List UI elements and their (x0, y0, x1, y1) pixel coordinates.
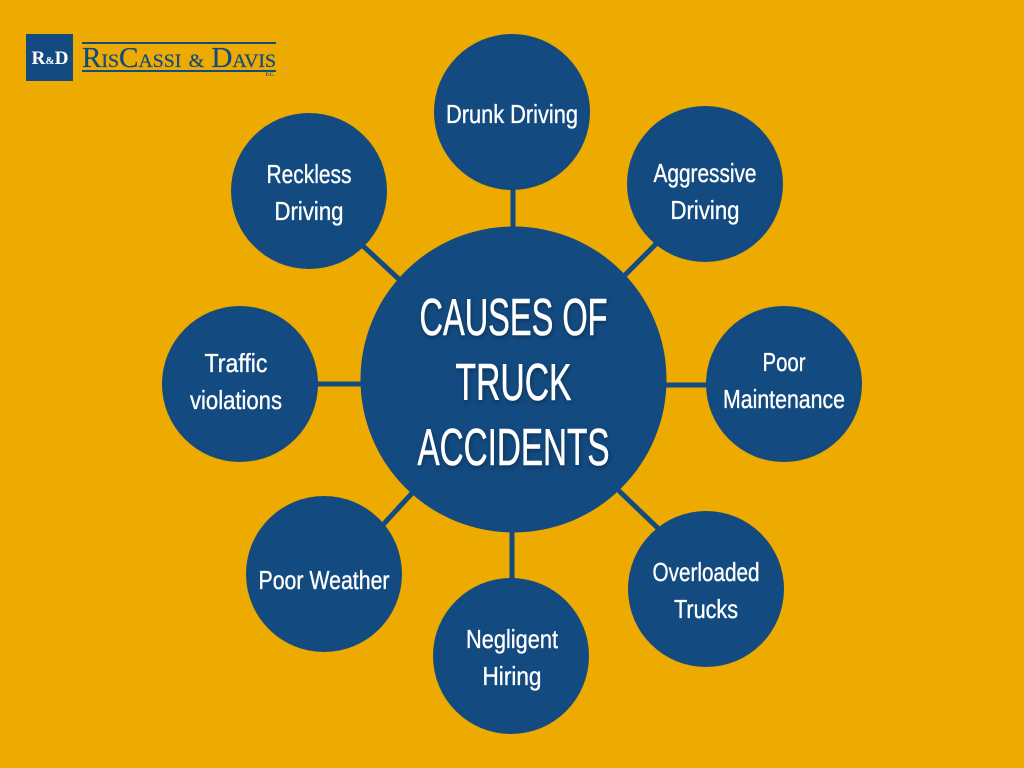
logo wordmark: RISCASSI & DAVIS (82, 43, 276, 74)
node: Drunk Driving (434, 34, 590, 190)
node: Reckless Driving: Driving (274, 196, 344, 226)
central title: CAUSES OF (420, 289, 608, 347)
node: Overloaded Trucks: Overloaded (652, 557, 760, 587)
logo (26, 34, 276, 81)
connector lines (310, 180, 715, 585)
central title: TRUCK (456, 354, 572, 412)
logo wordmark: P.C. (266, 73, 275, 78)
node: Negligent Hiring (433, 578, 589, 734)
node: Aggressive Driving: Aggressive (654, 158, 756, 188)
node: Traffic violations: violations (190, 385, 282, 415)
node: Poor Weather (246, 496, 402, 652)
node: Traffic violations: Traffic (204, 348, 268, 378)
node: Traffic violations (162, 306, 318, 462)
node: Poor Maintenance: Poor (762, 347, 806, 377)
node: Negligent Hiring: Negligent (466, 624, 559, 654)
node: Overloaded Trucks (628, 511, 784, 667)
node: Poor Maintenance: Maintenance (723, 384, 845, 414)
node: Overloaded Trucks: Trucks (674, 594, 738, 624)
node: Aggressive Driving (627, 106, 783, 262)
node: Aggressive Driving: Driving (670, 195, 740, 225)
central circle (360, 226, 666, 532)
node: Reckless Driving: Reckless (266, 159, 352, 189)
logo mark (26, 34, 73, 81)
node: Poor Weather: Poor Weather (258, 565, 390, 595)
node: Poor Maintenance (706, 306, 862, 462)
central title (418, 289, 610, 477)
node: Drunk Driving: Drunk Driving (446, 99, 578, 129)
central title: ACCIDENTS (418, 419, 610, 477)
node: Negligent Hiring: Hiring (482, 661, 542, 691)
node: Reckless Driving (231, 113, 387, 269)
logo mark: R&D (32, 48, 68, 69)
